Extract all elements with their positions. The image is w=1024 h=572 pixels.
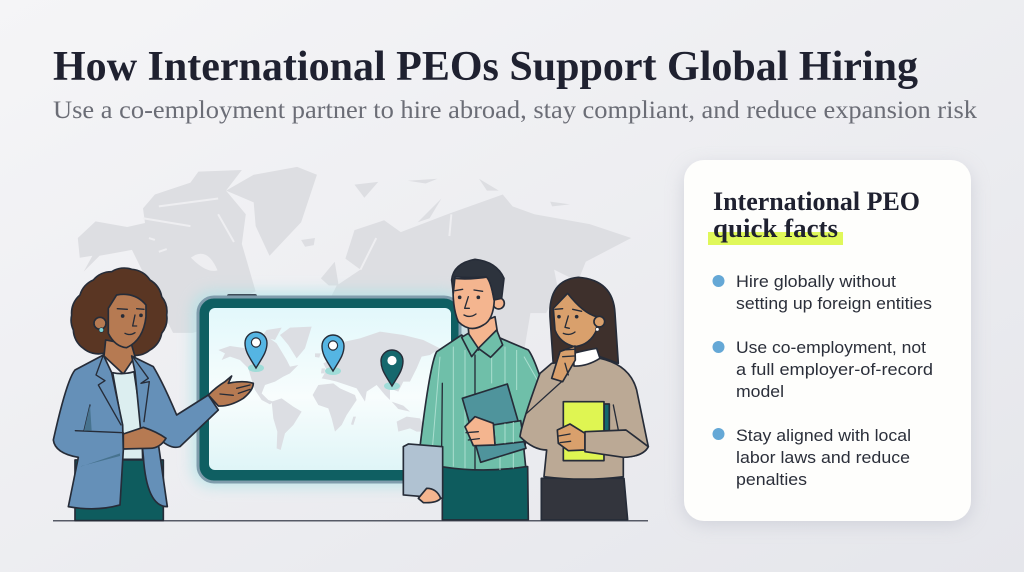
presenter woman — [53, 268, 253, 521]
fact 2: model — [736, 383, 784, 401]
ground line — [53, 520, 648, 522]
background world map — [78, 167, 631, 361]
map pin: Europe — [322, 335, 344, 375]
map pin: North America — [245, 332, 267, 372]
fact 1: Hire globally without — [736, 273, 896, 291]
fact 2: a full employer-of-record — [736, 361, 933, 379]
screen world map — [218, 327, 440, 450]
fact 3: penalties — [736, 471, 807, 489]
panel: quick facts — [684, 160, 971, 524]
fact 3: Stay aligned with local — [736, 427, 911, 445]
man with folder and notebook — [403, 259, 540, 520]
map pin: Asia — [381, 350, 403, 390]
subtitle: Use a co-employment partner to hire abroad, stay compliant, and reduce expansion risk — [53, 97, 978, 124]
fact 2 — [712, 339, 933, 401]
fact 3: labor laws and reduce — [736, 449, 910, 467]
panel heading highlight — [708, 232, 843, 245]
woman with yellow notebook — [520, 277, 648, 520]
panel heading — [713, 187, 920, 243]
panel heading: quick facts — [713, 214, 838, 243]
fact 2: Use co-employment, not — [736, 339, 926, 357]
fact 1 — [712, 273, 932, 313]
fact 1: setting up foreign entities — [736, 295, 932, 313]
tablet with world map — [192, 291, 464, 487]
fact 3 — [712, 427, 911, 489]
panel heading: International PEO — [713, 187, 920, 216]
title: How International PEOs Support Global Hiring — [53, 44, 918, 90]
